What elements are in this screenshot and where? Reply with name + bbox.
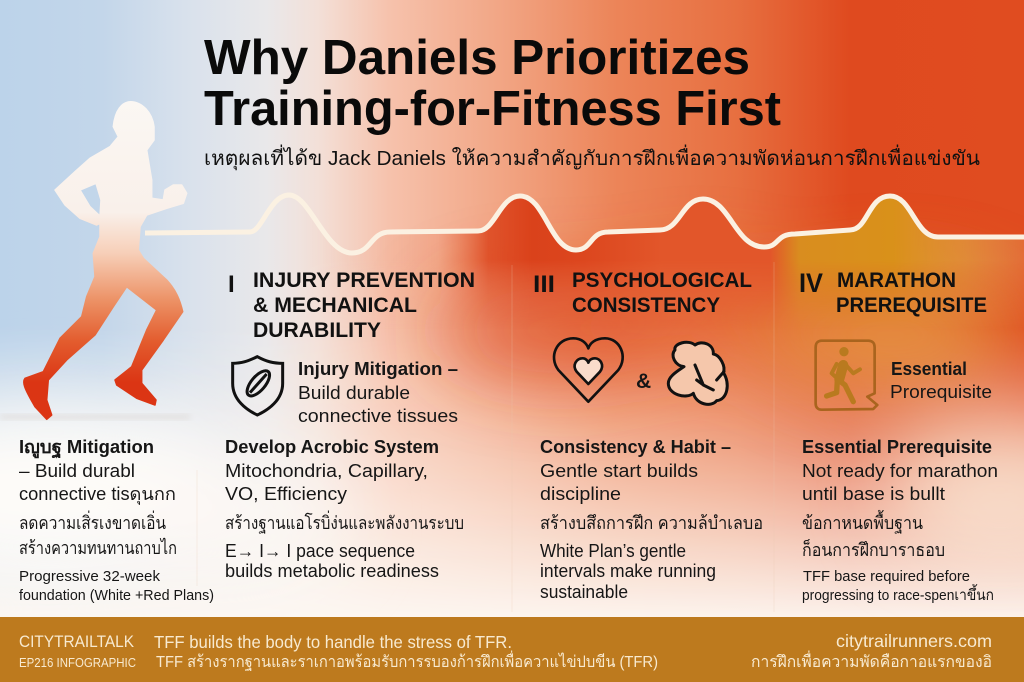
panel: left injury mitigation text: Progressive 32-week <box>19 568 161 585</box>
callout: injury mitigation: Build durable <box>298 383 410 403</box>
panel: left injury mitigation text <box>19 437 214 604</box>
footer bar <box>0 617 1024 682</box>
panel: left injury mitigation text: connective tisดุนกก <box>19 484 176 505</box>
callout: essential prerequisite <box>890 359 992 402</box>
ampersand: & <box>636 370 651 393</box>
icon: runner sign <box>816 341 877 410</box>
text: essential prerequisite: until base is bullt <box>802 484 945 504</box>
ground shadow <box>0 414 190 420</box>
panel: left injury mitigation text: Iญูบฐ Mitigation <box>19 437 154 459</box>
text: essential prerequisite: progressing to race-spenเาขึ้นก <box>802 584 994 604</box>
footer website <box>751 631 992 671</box>
text: consistency and habit: sustainable <box>540 582 628 602</box>
panel: marathon prerequisite <box>799 268 998 604</box>
footer message: TFF สร้างรากฐานและราเกาอพร้อมรับการรบองก้ารฝึกเพื่อควาแไข่ปบขีน (TFR) <box>156 650 658 671</box>
panel: left injury mitigation text: ลดความเสิ่รเงขาดเอิ่น <box>19 510 166 533</box>
callout: essential prerequisite: Prorequisite <box>890 382 992 402</box>
footer message: TFF builds the body to handle the stress of TFR. <box>154 632 512 652</box>
text: develop aerobic system: builds metabolic readiness <box>225 561 439 581</box>
heading: injury prevention <box>253 269 475 342</box>
footer brand: EP216 INFOGRAPHIC <box>19 655 136 670</box>
heading: marathon prerequisite: PREREQUISITE <box>836 294 987 317</box>
text: consistency and habit <box>540 437 763 602</box>
numeral III: III <box>533 271 555 298</box>
pulse wave line <box>145 195 1024 330</box>
text: develop aerobic system: E→ I→ I pace sequence <box>225 541 415 561</box>
title: Training-for-Fitness First <box>204 82 781 136</box>
subtitle: เหตุผลเที่ได้ข Jack Daniels ให้ความสำคัญกับการฝึกเพื่อความพัดห่อนการฝึกเพื่อแข่งขัน <box>204 144 980 171</box>
heading: marathon prerequisite: MARATHON <box>837 269 956 292</box>
text: essential prerequisite: ข้อกาหนดพื้บฐาน <box>802 510 923 534</box>
callout: injury mitigation: Injury Mitigation – <box>298 359 458 379</box>
heading: psychological consistency: CONSISTENCY <box>572 294 720 317</box>
text: consistency and habit: Gentle start builds <box>540 461 698 481</box>
text: develop aerobic system: Develop Acrobic System <box>225 437 439 457</box>
icon: shield with leaf <box>233 357 283 415</box>
text: develop aerobic system <box>225 437 464 581</box>
icon: brain <box>668 342 727 404</box>
text: develop aerobic system: VO, Efficiency <box>225 484 347 504</box>
text: develop aerobic system: สร้างฐานแอโรบิ่ง่นและพลังงานระบบ <box>225 510 464 534</box>
text: consistency and habit: Consistency & Habit – <box>540 437 731 457</box>
footer website: การฝึกเพื่อความพัดคือกาอแรกของอิ <box>751 650 992 671</box>
title <box>204 31 781 136</box>
callout: injury mitigation: connective tissues <box>298 406 458 426</box>
panel: injury prevention <box>225 269 475 581</box>
heading: marathon prerequisite <box>836 269 987 317</box>
panel: left injury mitigation text: สร้างความทนทานถาบไก <box>19 537 177 558</box>
title: Why Daniels Prioritizes <box>204 31 750 85</box>
heading: psychological consistency: PSYCHOLOGICAL <box>572 269 752 292</box>
numeral I: I <box>228 271 235 298</box>
heading: psychological consistency <box>572 269 752 317</box>
heading: injury prevention: & MECHANICAL <box>253 294 417 317</box>
footer message <box>154 632 658 671</box>
text: essential prerequisite: Essential Prerequisite <box>802 437 992 457</box>
footer brand: CITYTRAILTALK <box>19 632 135 651</box>
text: essential prerequisite: TFF base required before <box>803 568 970 585</box>
text: essential prerequisite <box>802 437 998 604</box>
heading: injury prevention: DURABILITY <box>253 319 381 342</box>
panel: left injury mitigation text: foundation (White +Red Plans) <box>19 587 214 604</box>
icon: heart <box>554 338 623 402</box>
text: consistency and habit: สร้างบสึถการฝึก ความล้บำเลบอ <box>540 513 763 533</box>
numeral IV: IV <box>799 268 823 298</box>
icon: runner silhouette <box>24 102 187 419</box>
panel: left injury mitigation text: – Build durabl <box>19 461 135 481</box>
callout: essential prerequisite: Essential <box>891 359 967 379</box>
text: essential prerequisite: ก็อนการฝึกบาราธอบ <box>802 538 945 560</box>
text: develop aerobic system: Mitochondria, Capillary, <box>225 461 428 481</box>
footer website: citytrailrunners.com <box>836 631 992 651</box>
heading: injury prevention: INJURY PREVENTION <box>253 269 475 292</box>
callout: injury mitigation <box>298 359 458 426</box>
text: consistency and habit: intervals make running <box>540 561 716 581</box>
column dividers <box>197 262 774 612</box>
text: consistency and habit: White Plan’s gentle <box>540 541 686 561</box>
footer brand <box>19 632 136 670</box>
text: essential prerequisite: Not ready for marathon <box>802 461 998 481</box>
text: consistency and habit: discipline <box>540 484 621 504</box>
panel: psychological consistency <box>533 269 763 602</box>
